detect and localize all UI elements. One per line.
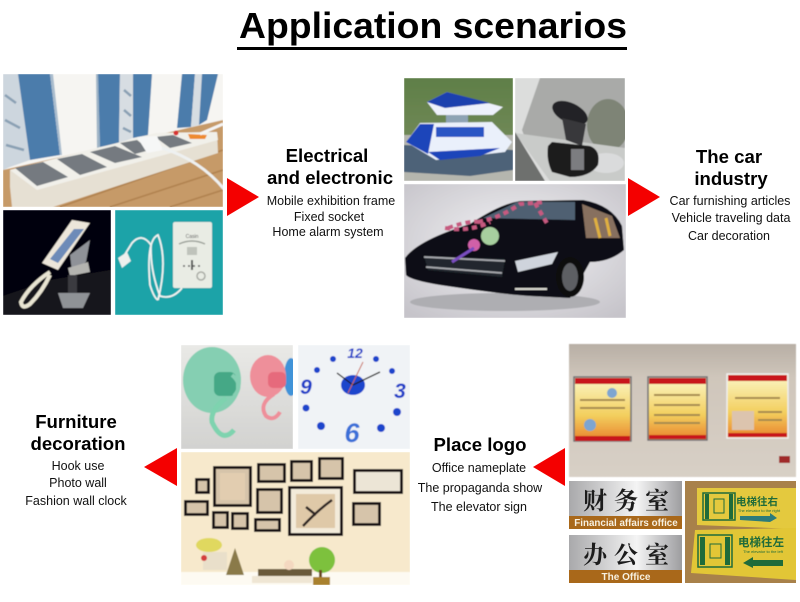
photo: propaganda wall: [569, 344, 796, 477]
text: car list: Vehicle traveling data: [672, 211, 790, 225]
photo: home alarm: Casin: [186, 234, 199, 240]
sign: the office: The Office: [602, 572, 651, 583]
panel: place logo: [418, 344, 796, 583]
heading: furniture decoration: decoration: [30, 433, 126, 454]
heading: the car industry: The car: [696, 146, 762, 167]
panel: electrical and electronic: [3, 74, 395, 315]
text: place logo list: The elevator sign: [431, 500, 527, 514]
title: Application scenarios: [239, 5, 627, 46]
text: furniture list: Fashion wall clock: [25, 494, 127, 508]
arrow: electrical: [227, 178, 259, 216]
heading: electrical and electronic: and electronic: [267, 167, 393, 188]
photo: home alarm: [115, 210, 223, 315]
arrow: furniture: [144, 448, 177, 486]
photo: crystal ornament: [404, 78, 513, 181]
sign: elevator: The elevator to the left: [743, 549, 784, 554]
sign: elevator: The elevator to the right: [738, 508, 781, 513]
arrow: place logo: [533, 448, 565, 486]
text: electrical list: Home alarm system: [272, 225, 384, 239]
heading: the car industry: industry: [694, 168, 768, 189]
text: electrical list: Fixed socket: [294, 210, 365, 224]
photo: photo wall: [181, 452, 410, 585]
photo: wall clock: 9: [300, 376, 312, 399]
panel: car industry: [404, 78, 790, 318]
text: place logo list: The propaganda show: [418, 481, 543, 495]
sign: the office: 办公室: [583, 535, 676, 570]
text: furniture list: Hook use: [52, 459, 104, 473]
sign: elevator: 电梯往左: [738, 535, 784, 549]
photo: wall clock: 3: [394, 380, 406, 403]
sign: elevator: 电梯往右: [736, 495, 778, 508]
photo: wall clock: [298, 345, 410, 449]
arrow: car: [628, 178, 660, 216]
photo: dashcam: [515, 78, 629, 181]
text: car list: Car decoration: [688, 229, 770, 243]
sign: the office: [569, 535, 682, 583]
photo: wall clock: 6: [344, 418, 360, 448]
sign: financial affairs office: Financial affairs office: [574, 518, 678, 529]
text: furniture list: Photo wall: [49, 476, 107, 490]
photo: power strip: [3, 74, 224, 207]
heading: electrical and electronic: Electrical: [286, 145, 368, 166]
photo: decorated car: [404, 184, 626, 318]
heading: furniture decoration: Furniture: [35, 411, 117, 432]
sign: financial affairs office: [569, 481, 682, 529]
panel: furniture decoration: [25, 345, 410, 585]
text: car list: Car furnishing articles: [670, 194, 790, 208]
photo: hooks: [181, 345, 298, 449]
sign: financial affairs office: 财务室: [583, 481, 676, 516]
photo: phone exhibition frame: [3, 210, 111, 315]
text: electrical list: Mobile exhibition frame: [267, 194, 395, 208]
photo: wall clock: 12: [347, 345, 363, 361]
heading: place logo: Place logo: [434, 434, 526, 455]
sign: elevator: [685, 481, 796, 583]
text: place logo list: Office nameplate: [432, 461, 526, 475]
